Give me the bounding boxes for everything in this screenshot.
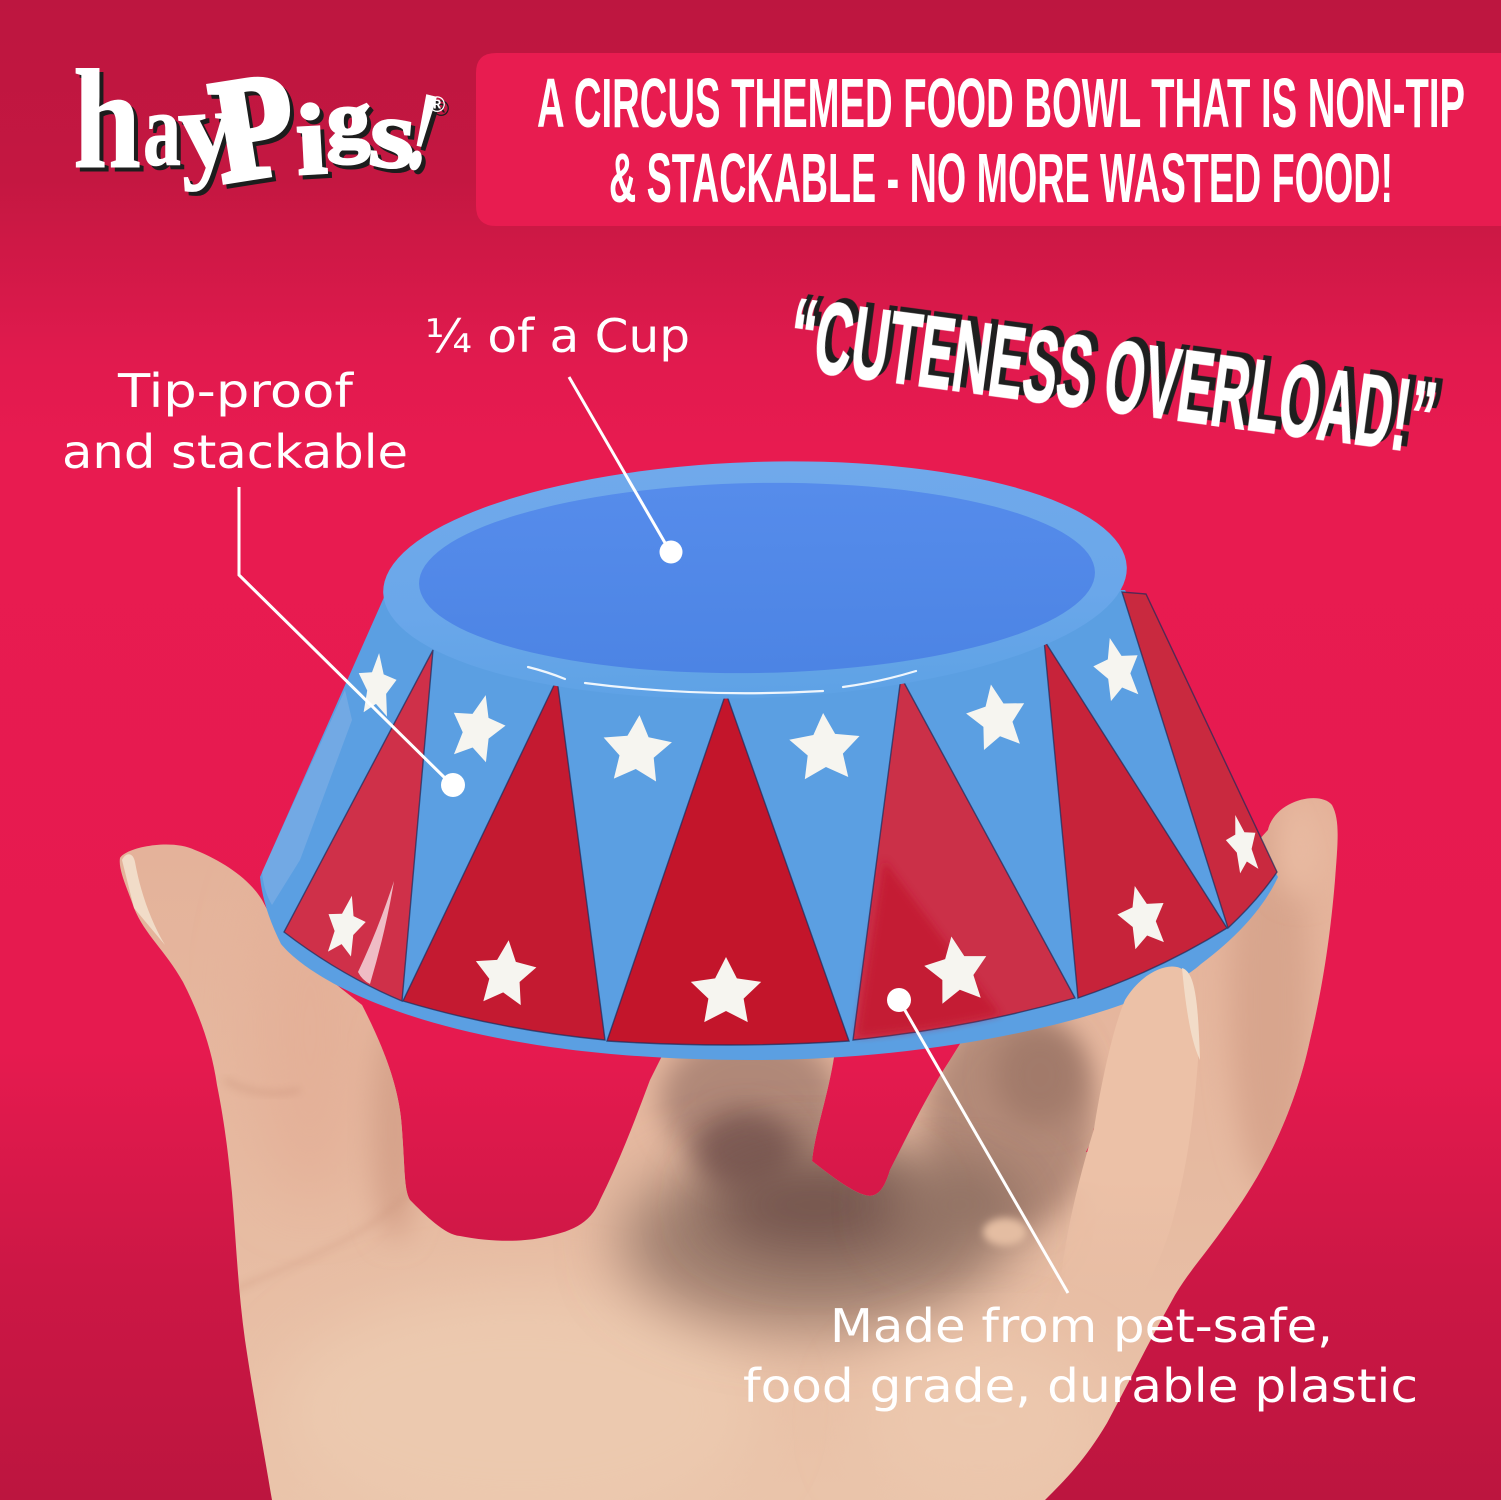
callout: tip-proof and stackable: and stackable bbox=[62, 425, 408, 479]
bowl reflection stripe bbox=[358, 881, 394, 984]
callout: pet-safe plastic: Made from pet-safe, bbox=[830, 1299, 1333, 1353]
red triangles bbox=[284, 592, 1277, 1045]
logo: hayPigs!: h bbox=[73, 40, 141, 198]
bowl body bbox=[260, 590, 1278, 1060]
logo: hayPigs!: s bbox=[365, 76, 421, 191]
callout: quarter cup: ¼ of a Cup bbox=[425, 309, 690, 363]
logo: hayPigs!: ! bbox=[397, 69, 448, 195]
rim highlights bbox=[528, 667, 916, 693]
callout: quarter cup bbox=[425, 309, 690, 564]
logo: hayPigs!: g bbox=[327, 76, 370, 164]
bowl left edge reflection bbox=[262, 690, 352, 905]
header banner bbox=[476, 53, 1501, 226]
logo: hayPigs!: i bbox=[293, 84, 329, 196]
callout: pet-safe plastic: food grade, durable plastic bbox=[743, 1359, 1418, 1413]
bowl rim bbox=[379, 449, 1131, 711]
bowl bbox=[260, 449, 1278, 1060]
logo: hayPigs!: a bbox=[143, 71, 181, 188]
bowl interior bbox=[417, 477, 1097, 679]
callout: tip-proof and stackable bbox=[62, 364, 465, 797]
stars bbox=[321, 632, 1264, 1022]
logo: hayPigs!: y bbox=[174, 65, 239, 193]
callout: tip-proof and stackable: Tip-proof bbox=[117, 364, 355, 418]
hand holding the bowl bbox=[120, 798, 1338, 1500]
logo: hayPigs!: P bbox=[202, 40, 306, 214]
logo: hayPigs!: ® bbox=[429, 92, 445, 117]
callout: pet-safe plastic bbox=[743, 988, 1418, 1413]
logo: hayPigs! bbox=[73, 40, 448, 214]
shaded triangle facet bbox=[857, 860, 1000, 1036]
index finger over bowl bbox=[1060, 967, 1200, 1310]
